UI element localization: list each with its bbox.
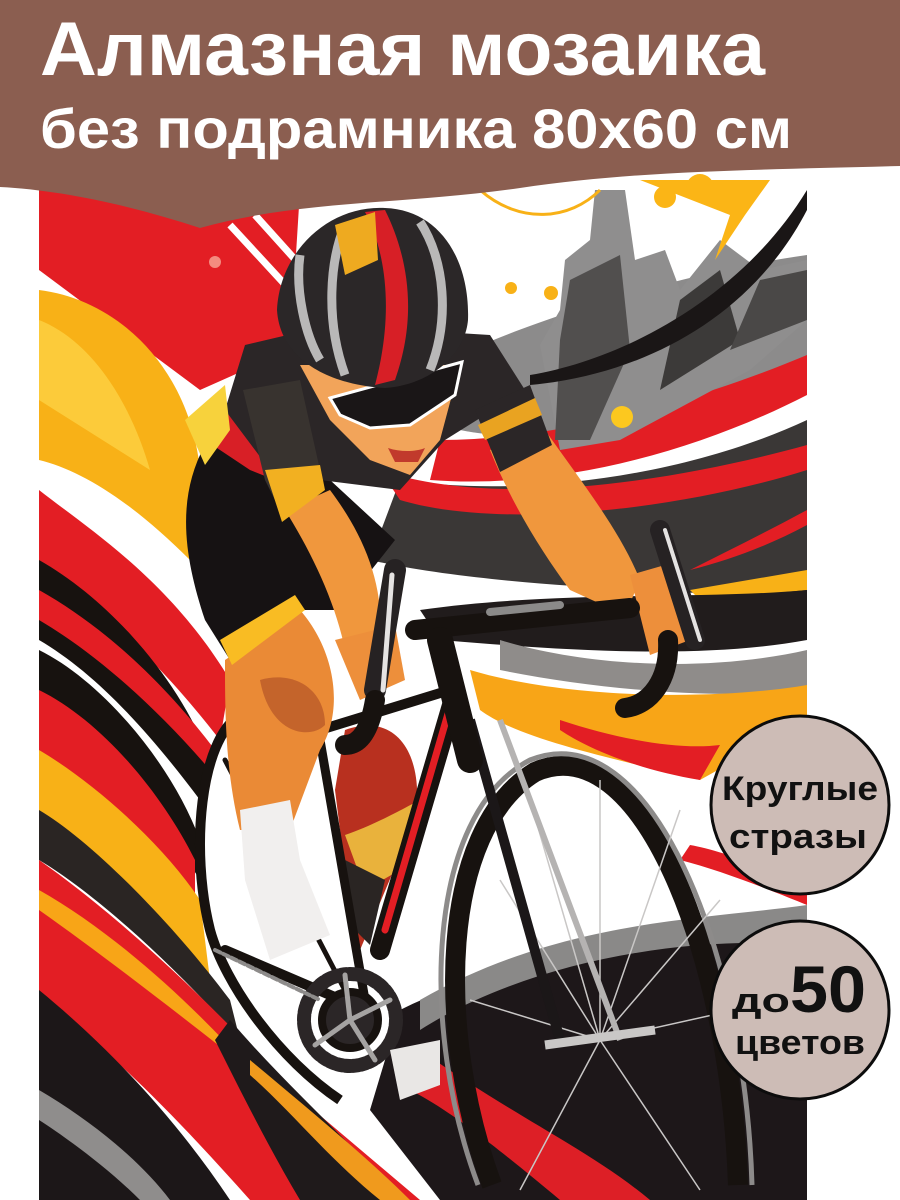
header banner (0, 0, 900, 228)
artwork: cyclist painting (39, 170, 807, 1200)
handlebars and levers (345, 530, 700, 760)
helmet (277, 208, 468, 388)
near leg (225, 610, 334, 830)
front wheel (441, 720, 752, 1190)
pedal and shoe lower (390, 1040, 440, 1100)
cyclist body (185, 208, 690, 960)
city (556, 190, 750, 450)
rear wheel (200, 715, 340, 1100)
badge: up to 50 colours (711, 921, 889, 1099)
title: Алмазная мозаика (40, 7, 766, 92)
right side swooshes (460, 255, 807, 436)
shorts (186, 440, 395, 660)
arms (490, 434, 637, 602)
road dark (370, 938, 807, 1200)
badge: up to 50 colours: цветов (735, 1024, 865, 1062)
glasses (330, 362, 462, 428)
background swooshes (39, 174, 807, 1200)
bike frame and crankset (215, 690, 455, 1066)
subtitle: без подрамника 80х60 см (40, 97, 792, 160)
far leg (335, 726, 420, 950)
badge: round rhinestones (711, 716, 889, 894)
hands (335, 625, 405, 700)
badge: round rhinestones: стразы (729, 818, 867, 856)
torso jersey (225, 325, 525, 490)
badge: round rhinestones: Круглые (722, 770, 878, 808)
face (300, 365, 460, 475)
badge: up to 50 colours: до (732, 982, 790, 1020)
badge: up to 50 colours: 50 (790, 952, 866, 1026)
